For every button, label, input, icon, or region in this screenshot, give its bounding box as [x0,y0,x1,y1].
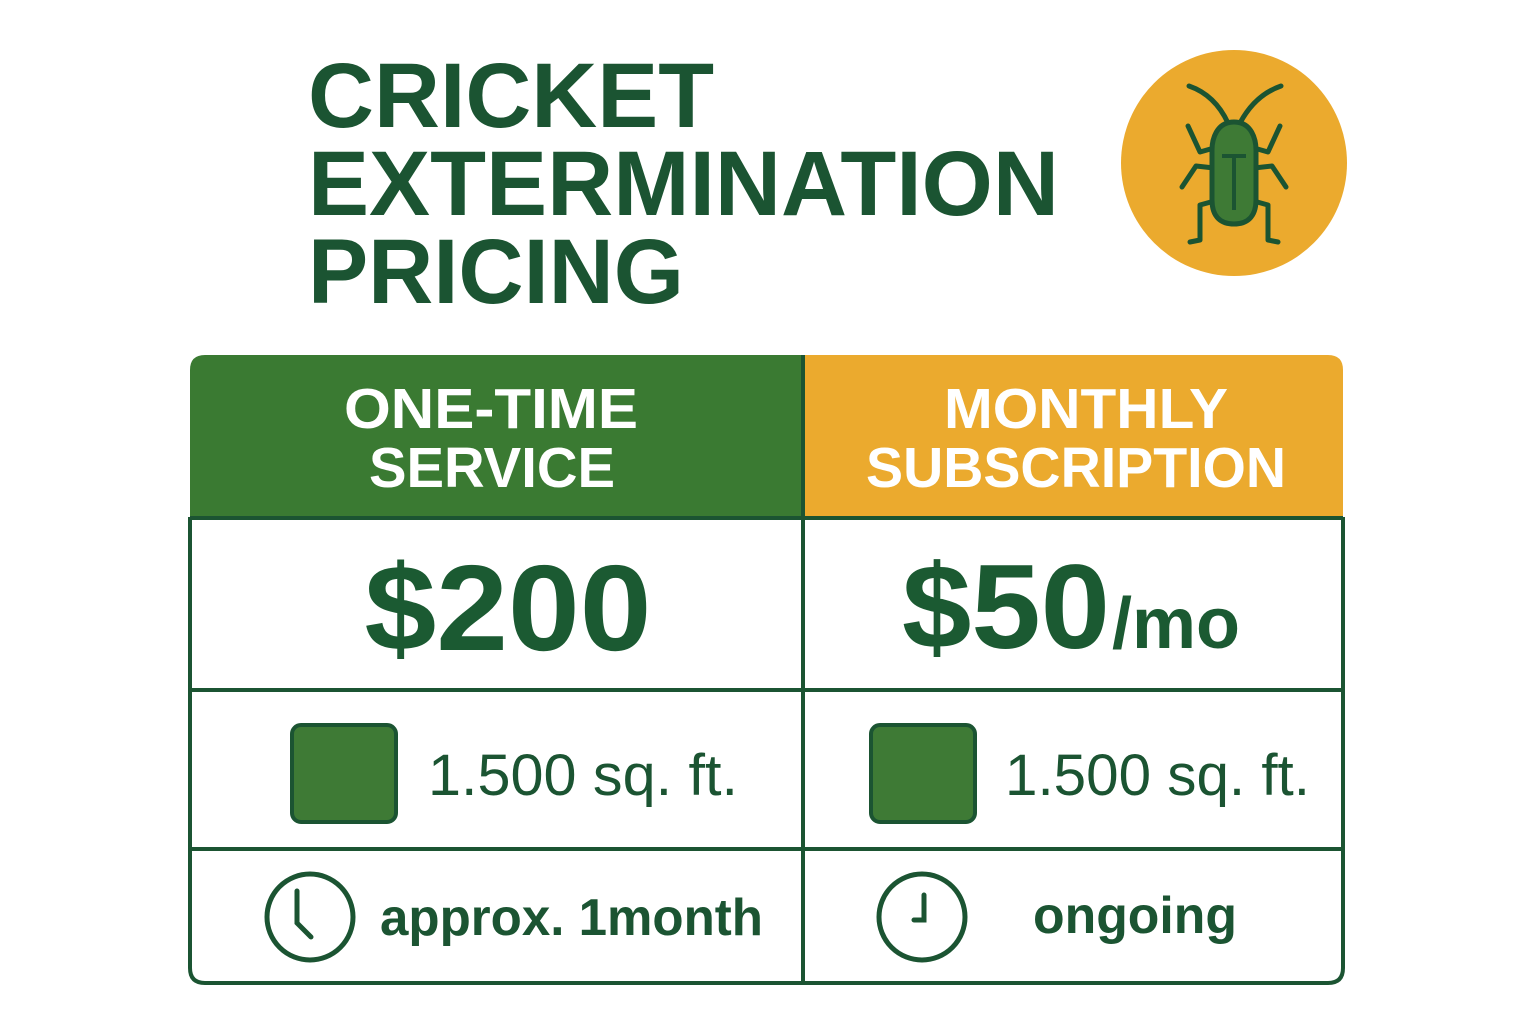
price: $50/mo: $50/mo [902,540,1240,674]
header: one-time service [190,355,803,517]
duration: monthly: ongoing [1033,887,1237,945]
header: monthly subscription [803,355,1343,517]
title: EXTERMINATION [308,133,1059,235]
area: monthly [871,725,1310,822]
area: one-time [292,725,738,822]
duration: one-time: approx. 1month [380,889,763,947]
duration: monthly [879,874,1237,960]
header: monthly subscription: SUBSCRIPTION [866,436,1286,500]
price: $200: $200 [364,540,652,676]
title: PRICING [308,221,684,323]
duration: one-time [267,874,763,960]
header: monthly subscription: MONTHLY [944,377,1228,441]
area: one-time: 1.500 sq. ft. [428,743,738,808]
icon: cricket in circle [1121,50,1347,276]
area: monthly: 1.500 sq. ft. [1005,743,1310,808]
header: one-time service: SERVICE [369,436,615,500]
panel: pricing table [190,355,1343,983]
title [308,45,1059,323]
header: one-time service: ONE-TIME [344,377,638,441]
title: CRICKET [308,45,714,147]
